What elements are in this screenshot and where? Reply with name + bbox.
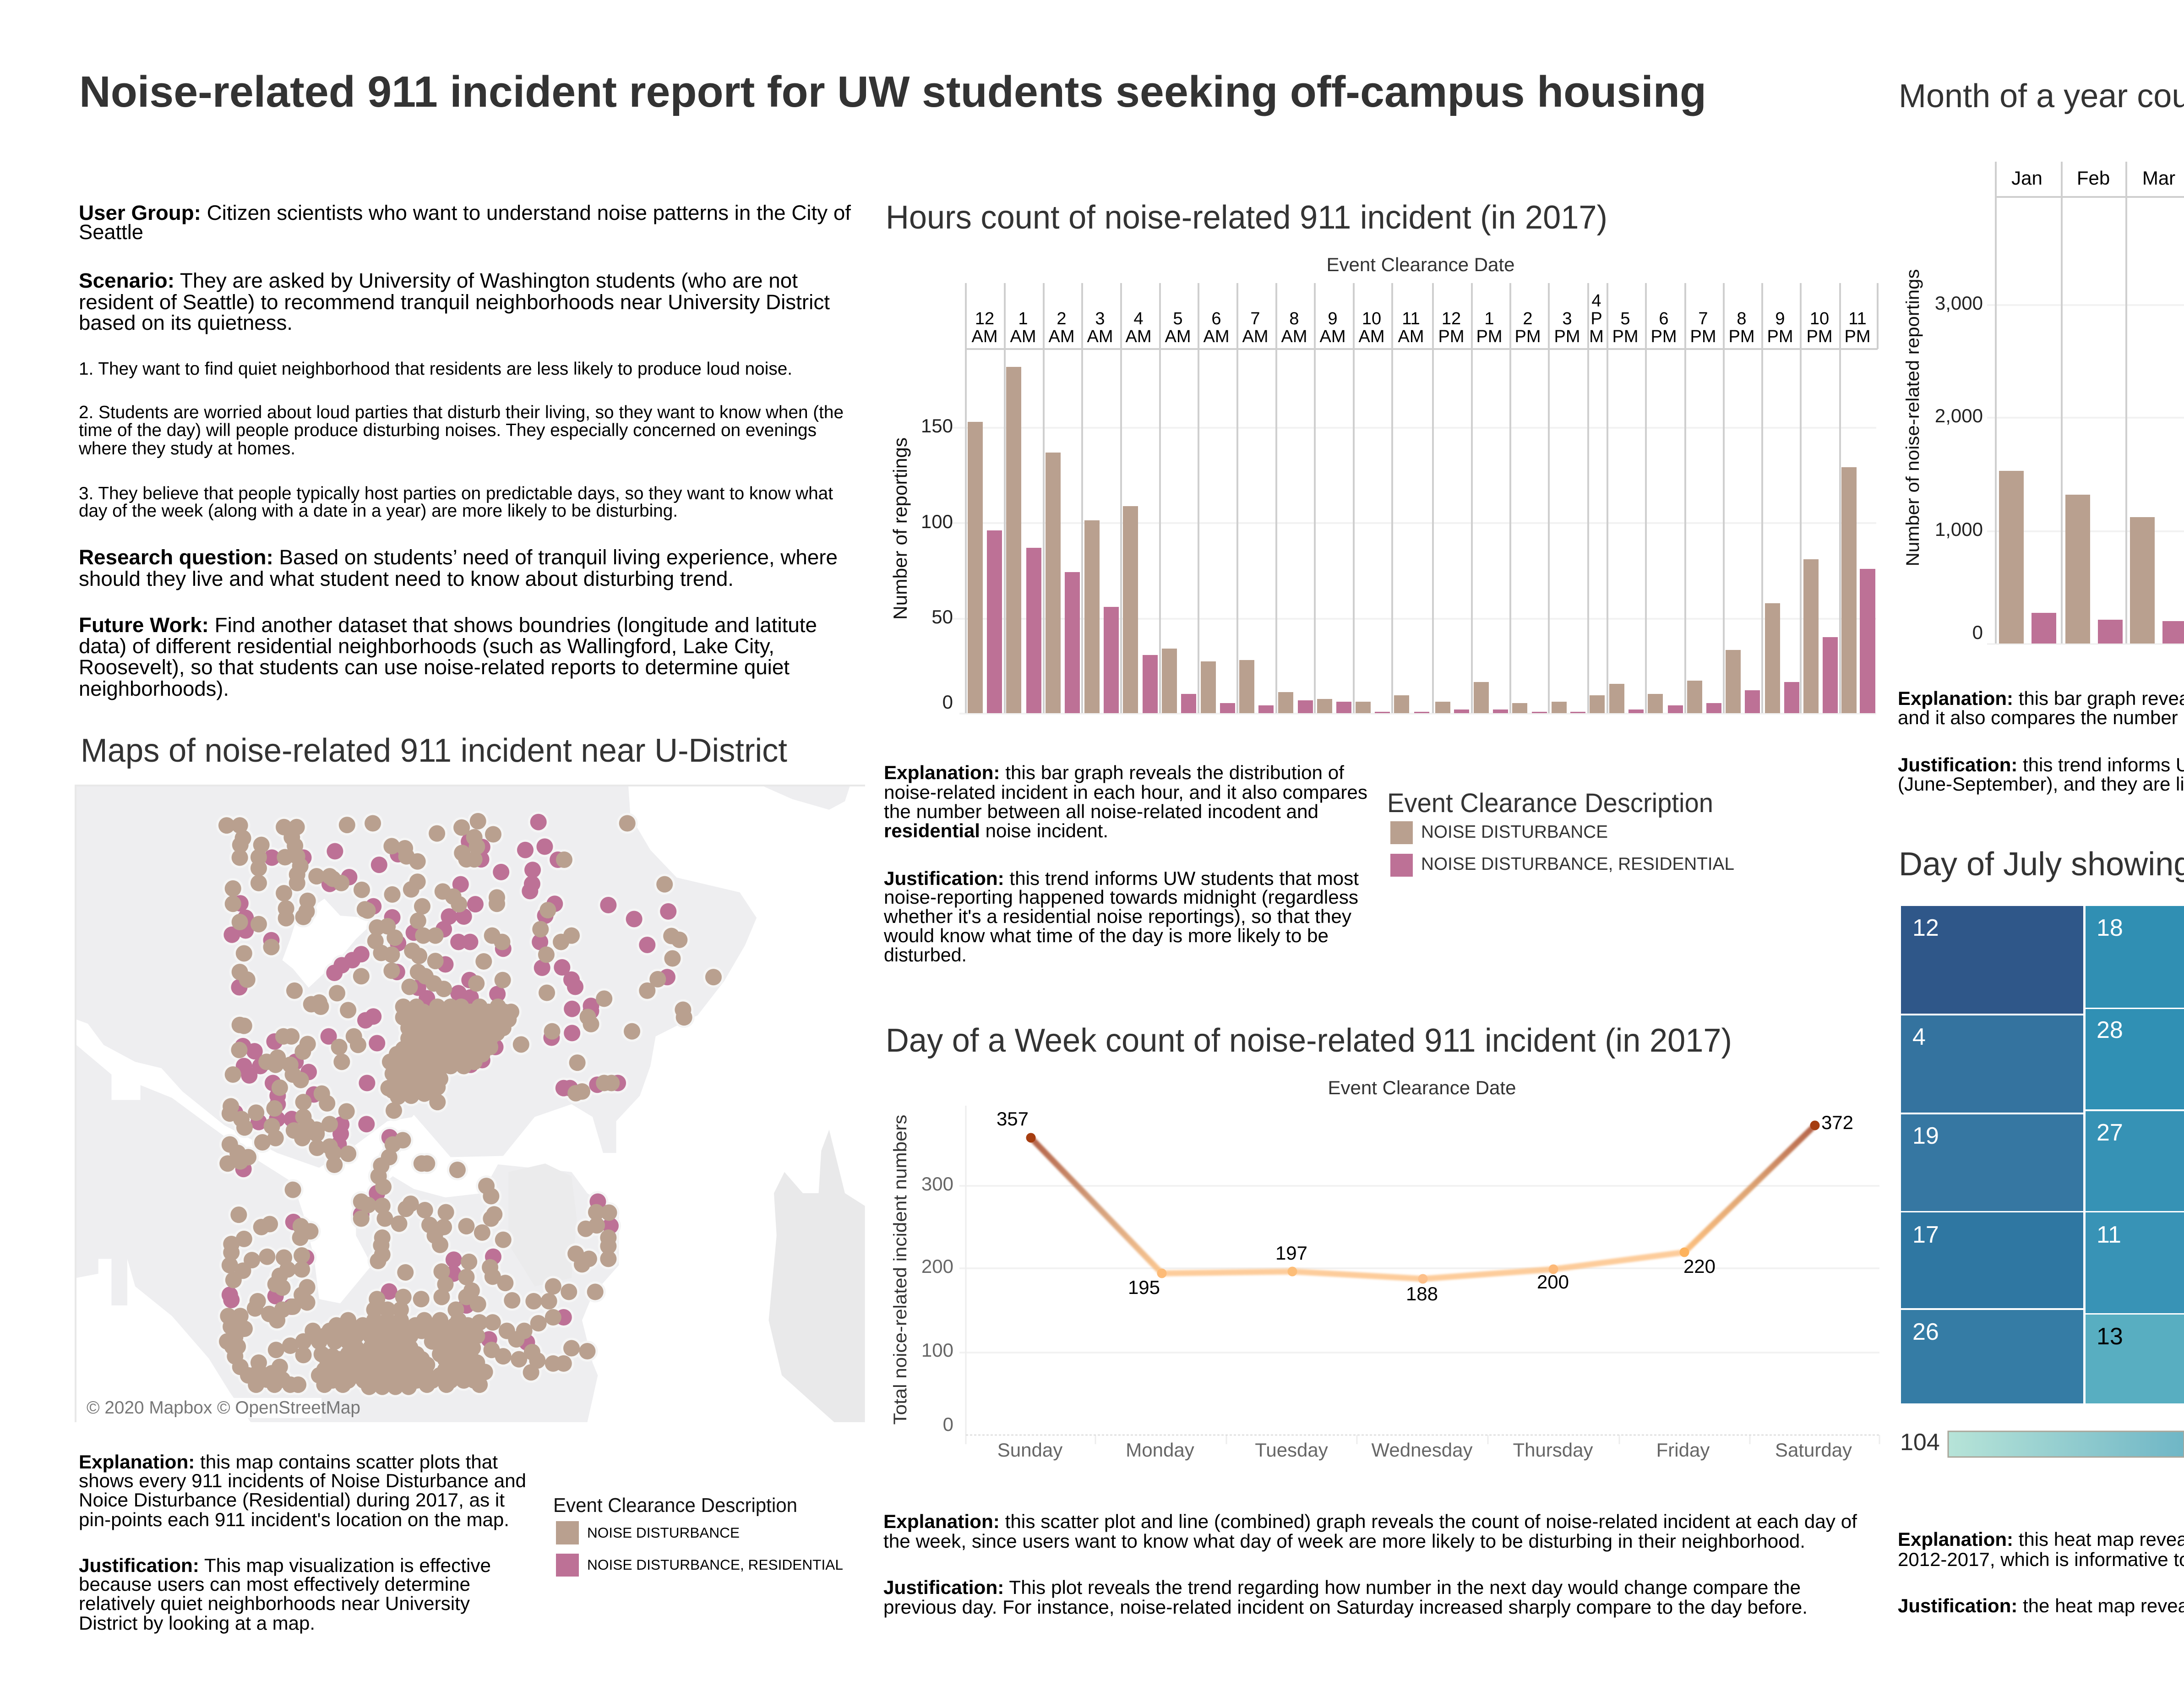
user group: User Group: Citizen scientists who want to understand noise patterns in the City of	[79, 201, 851, 224]
data labels: 357	[997, 1108, 1029, 1130]
heat map day labels: 13	[2097, 1323, 2123, 1350]
hour labels: AM	[1087, 327, 1113, 346]
heat map day labels: 19	[1912, 1123, 1939, 1149]
heat map day labels: 26	[1912, 1319, 1939, 1345]
hour labels: 10	[1810, 309, 1829, 328]
hour labels: PM	[1845, 327, 1870, 346]
hour labels: 12	[975, 309, 994, 328]
hour labels: 6	[1211, 309, 1221, 328]
research question	[79, 546, 838, 590]
hour labels: PM	[1438, 327, 1465, 346]
heat map day labels: 12	[1912, 915, 1939, 941]
text block: hours explanation	[883, 762, 1367, 966]
hour labels: 10	[1362, 309, 1381, 328]
hour labels: 8	[1737, 309, 1747, 328]
hour labels: AM	[1010, 327, 1036, 346]
need 3: day of the week (along with a date in a year) are more likely to be disturbing.	[79, 501, 678, 521]
text block: hours explanation: whether it's a residential noise reportings), so that they	[883, 906, 1351, 927]
text block: weekday explanation: previous day. For instance, noise-related incident on Saturday increased sharply compare to the day before.	[883, 1596, 1808, 1618]
weekday heading: Day of a Week count of noise-related 911 incident (in 2017)	[886, 1022, 1732, 1059]
weekday x labels: Sunday	[997, 1439, 1062, 1461]
month labels: Mar	[2142, 167, 2175, 189]
hour labels: AM	[1165, 327, 1191, 346]
hour labels: 3	[1095, 309, 1105, 328]
weekday y axis	[890, 1115, 953, 1435]
hour labels: 9	[1775, 309, 1785, 328]
legend: hours: NOISE DISTURBANCE, RESIDENTIAL	[1421, 854, 1734, 874]
map frame	[75, 785, 865, 1422]
future work: Roosevelt), so that students can use noise-related reports to determine quiet	[79, 655, 790, 679]
hour labels: 7	[1250, 309, 1260, 328]
text block: hours explanation: would know what time of the day is more likely to be	[883, 925, 1329, 946]
scenario: Scenario: They are asked by University of Washington students (who are not	[79, 269, 798, 292]
text block: hours explanation: disturbed.	[884, 944, 967, 966]
scenario	[79, 269, 830, 334]
legend: map: Event Clearance Description	[553, 1494, 797, 1517]
hours heading: Hours count of noise-related 911 incident (in 2017)	[886, 199, 1607, 236]
hour labels: M	[1589, 327, 1604, 346]
hour labels: AM	[1126, 327, 1151, 346]
month labels: Feb	[2077, 167, 2110, 189]
data labels: 200	[1537, 1271, 1569, 1293]
hour labels: 7	[1698, 309, 1708, 328]
text block: map explanation: District by looking at a map.	[79, 1612, 315, 1634]
heat map day labels	[1912, 915, 2123, 1350]
text block: map explanation: Explanation: this map contains scatter plots that	[79, 1451, 498, 1473]
need 2	[78, 403, 844, 458]
hour labels: 6	[1659, 309, 1669, 328]
hour labels: 3	[1562, 309, 1572, 328]
hour labels: PM	[1612, 327, 1639, 346]
map land and water	[75, 785, 865, 1422]
hour labels: AM	[1204, 327, 1229, 346]
research question: Research question: Based on students’ need of tranquil living experience, where	[79, 546, 838, 569]
month bars	[1999, 471, 2184, 644]
hour labels: AM	[1320, 327, 1345, 346]
need 3	[79, 484, 833, 521]
weekday x labels: Tuesday	[1255, 1439, 1328, 1461]
hour bars: noise disturbance	[968, 367, 1857, 713]
hour labels: 9	[1328, 309, 1338, 328]
hours y axis: 150	[921, 415, 953, 437]
hour labels: 5	[1173, 309, 1183, 328]
need 2: 2. Students are worried about loud parties that disturb their living, so they want to know when (the	[79, 403, 844, 422]
month y axis: 3,000	[1935, 292, 1983, 314]
hour labels: PM	[1650, 327, 1677, 346]
text block: weekday explanation: the week, since users want to know what day of week are more likely to be disturbing in their neighborhood.	[883, 1530, 1805, 1552]
hour labels: PM	[1476, 327, 1502, 346]
text block: project description	[78, 201, 851, 700]
hour labels: P	[1590, 309, 1602, 328]
text block: hours explanation: noise-related incident in each hour, and it also compares	[884, 781, 1367, 803]
hour labels: PM	[1806, 327, 1833, 346]
hour labels: PM	[1690, 327, 1716, 346]
hour labels: AM	[1242, 327, 1269, 346]
text block: map explanation: relatively quiet neighborhoods near University	[79, 1593, 470, 1614]
map attribution: © 2020 Mapbox © OpenStreetMap	[87, 1398, 360, 1418]
weekday y axis: Total noice-related incident numbers	[890, 1115, 910, 1424]
hour labels: PM	[1554, 327, 1580, 346]
panel: monthly bar chart	[1899, 78, 2184, 644]
hour labels: 4	[1133, 309, 1144, 328]
user group	[79, 201, 851, 244]
month y axis: Number of noise-related reportings	[1903, 269, 1923, 566]
text block: hours explanation: Justification: this trend informs UW students that most	[884, 868, 1359, 889]
data labels: 220	[1683, 1255, 1716, 1277]
weekday x labels: Monday	[1126, 1439, 1194, 1461]
month labels	[2011, 167, 2175, 189]
text block: map explanation: because users can most effectively determine	[79, 1573, 470, 1595]
text block: weekday explanation: Justification: This plot reveals the trend regarding how number in the next day would change compare the	[883, 1577, 1801, 1598]
data labels: 188	[1406, 1283, 1438, 1304]
data labels: 372	[1821, 1112, 1853, 1133]
hour labels: AM	[1281, 327, 1307, 346]
hour labels: 8	[1289, 309, 1299, 328]
data labels: 197	[1275, 1242, 1307, 1264]
weekday x labels	[997, 1439, 1852, 1461]
month y axis: 1,000	[1935, 518, 1983, 540]
future work: Future Work: Find another dataset that shows boundries (longitude and latitute	[79, 613, 817, 637]
text block: hours explanation: the number between all noise-related incodent and	[884, 801, 1318, 822]
weekday x labels: Wednesday	[1371, 1439, 1473, 1461]
legend: hours	[1387, 788, 1734, 877]
weekday x labels: Saturday	[1775, 1439, 1852, 1461]
hour labels: PM	[1767, 327, 1793, 346]
color legend: 104	[1900, 1429, 1940, 1456]
future work: neighborhoods).	[79, 677, 229, 700]
legend: map: NOISE DISTURBANCE, RESIDENTIAL	[587, 1556, 843, 1573]
hour labels: 4	[1591, 291, 1601, 311]
scenario: resident of Seattle) to recommend tranquil neighborhoods near University District	[79, 290, 830, 314]
incident scatter dots	[227, 821, 713, 1387]
weekday y axis: 0	[943, 1413, 953, 1435]
text block: hours explanation: noise-reporting happened towards midnight (regardless	[884, 886, 1358, 908]
color legend	[1900, 1429, 2184, 1457]
panel: hourly bar chart	[886, 199, 1878, 714]
trend line	[1031, 1125, 1815, 1279]
text block: hours explanation: Explanation: this bar graph reveals the distribution of	[884, 762, 1344, 783]
heat map cells	[1901, 906, 2184, 1403]
text block: month explanation: and it also compares the number	[1898, 707, 2178, 728]
hours axis title: Event Clearance Date	[1327, 254, 1514, 275]
data labels	[997, 1108, 1853, 1304]
legend: hours: NOISE DISTURBANCE	[1421, 822, 1608, 842]
title: Noise-related 911 incident report for UW students seeking off-campus housing	[79, 67, 1706, 116]
weekday axis title: Event Clearance Date	[1328, 1077, 1516, 1098]
weekday y axis: 300	[921, 1173, 953, 1195]
hour labels: 11	[1402, 309, 1420, 328]
panel: map	[75, 732, 865, 1422]
need 3: 3. They believe that people typically host parties on predictable days, so they want to know what	[79, 484, 833, 503]
hours y axis: 50	[931, 606, 953, 628]
future work: data) of different residential neighborhoods (such as Wallingford, Lake City,	[79, 634, 774, 658]
hours y axis: 0	[942, 691, 953, 713]
need 2: where they study at homes.	[78, 439, 295, 458]
month labels: Jan	[2011, 167, 2042, 189]
hour labels: AM	[1358, 327, 1385, 346]
hour labels: 1	[1484, 309, 1494, 328]
hour labels: 2	[1057, 309, 1067, 328]
legend: map	[553, 1494, 843, 1577]
heat map day labels: 4	[1912, 1024, 1926, 1050]
text block: map explanation: shows every 911 incidents of Noise Disturbance and	[79, 1470, 526, 1491]
text block: heat map explanation	[1898, 1528, 2184, 1616]
month y axis: 2,000	[1935, 405, 1983, 426]
research question: should they live and what student need to know about disturbing trend.	[79, 567, 734, 590]
data labels: 195	[1128, 1277, 1160, 1298]
hour labels: AM	[1398, 327, 1424, 346]
weekday x labels: Thursday	[1513, 1439, 1593, 1461]
text block: weekday explanation: Explanation: this scatter plot and line (combined) graph reveals the count of noise-related incident at each day of	[883, 1511, 1857, 1532]
July heading: Day of July showing	[1899, 846, 2184, 883]
month y axis: 0	[1972, 622, 1983, 643]
heat map day labels: 18	[2097, 915, 2123, 941]
heat map day labels: 17	[1912, 1222, 1939, 1248]
hour labels	[972, 291, 1870, 346]
text block: month explanation	[1898, 688, 2184, 795]
weekday y axis: 100	[921, 1339, 953, 1361]
legend: map: NOISE DISTURBANCE	[587, 1524, 740, 1541]
hour labels: 1	[1018, 309, 1028, 328]
text block: map explanation: Justification: This map visualization is effective	[79, 1555, 491, 1576]
user group: Seattle	[79, 220, 143, 244]
weekday y axis: 200	[921, 1255, 953, 1277]
future work	[79, 613, 817, 700]
need 1: 1. They want to find quiet neighborhood that residents are less likely to produce loud noise.	[79, 359, 792, 379]
heat map day labels: 27	[2097, 1119, 2123, 1146]
scenario: based on its quietness.	[79, 311, 293, 334]
text block: map explanation: pin-points each 911 incident's location on the map.	[79, 1509, 509, 1530]
heat map day labels: 28	[2097, 1017, 2123, 1043]
hour labels: PM	[1515, 327, 1541, 346]
text block: map explanation	[79, 1451, 526, 1634]
text block: hours explanation: residential noise incident.	[884, 820, 1108, 841]
hour labels: 11	[1848, 309, 1867, 328]
hour labels: AM	[1049, 327, 1074, 346]
text block: map explanation: Noice Disturbance (Residential) during 2017, as it	[79, 1489, 505, 1511]
hour bars: residential	[987, 530, 1875, 713]
text block: heat map explanation: 2012-2017, which is informative to	[1898, 1549, 2184, 1570]
text block: weekday explanation	[883, 1511, 1857, 1618]
hour labels: PM	[1728, 327, 1755, 346]
panel: July heat map	[1899, 846, 2184, 1457]
month y axis	[1903, 269, 1983, 643]
hour labels: 2	[1523, 309, 1533, 328]
legend: hours: Event Clearance Description	[1387, 788, 1713, 818]
panel: day of week line chart	[886, 1022, 1879, 1461]
need 2: time of the day) will people produce disturbing noises. They especially concerned on evenings	[79, 420, 817, 440]
weekday x labels: Friday	[1656, 1439, 1710, 1461]
hours y axis: 100	[921, 511, 953, 532]
map heading: Maps of noise-related 911 incident near U-District	[81, 732, 787, 769]
data points	[1026, 1120, 1820, 1283]
hour labels: AM	[972, 327, 997, 346]
heat map day labels: 11	[2097, 1222, 2121, 1248]
hours y axis	[889, 415, 953, 713]
hour labels: 12	[1442, 309, 1461, 328]
hours y axis: Number of reportings	[889, 437, 911, 620]
hour labels: 5	[1620, 309, 1630, 328]
